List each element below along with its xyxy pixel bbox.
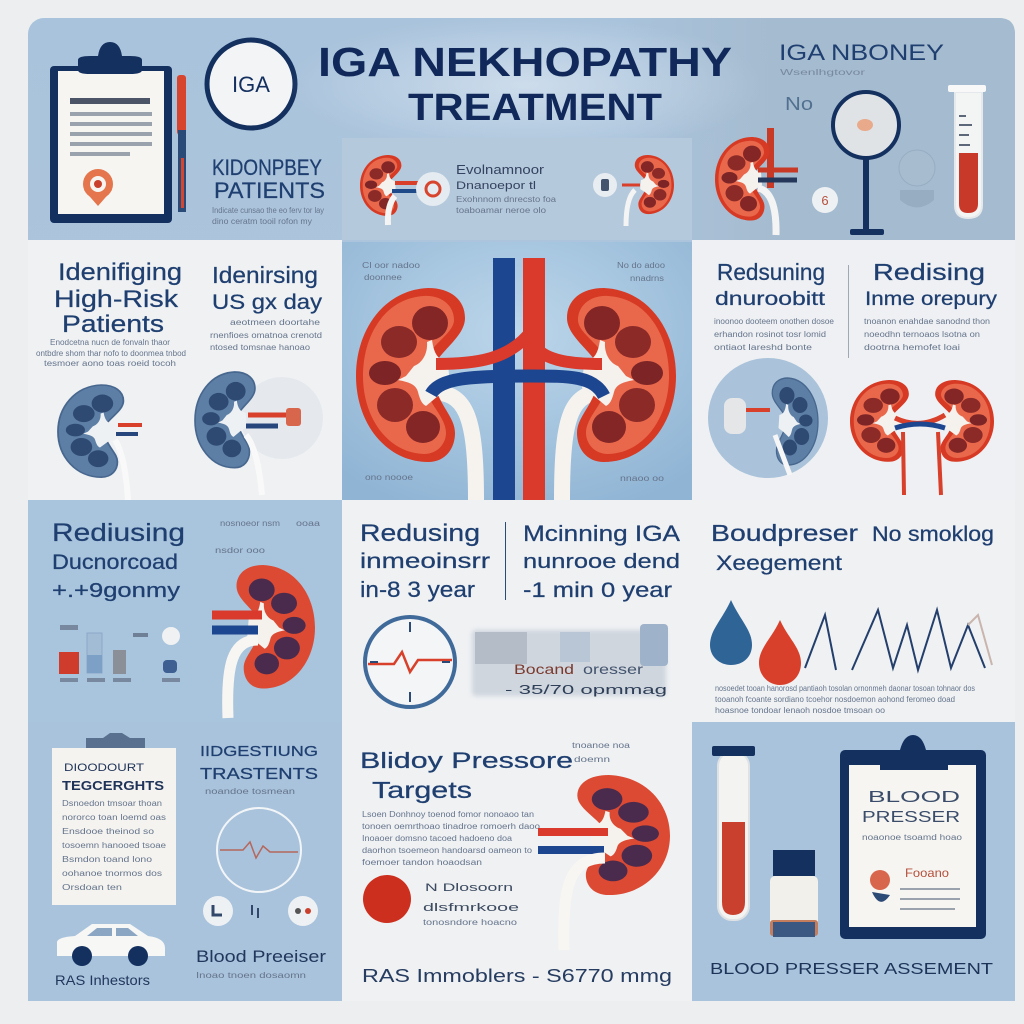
bar chart xyxy=(59,625,180,682)
text block: dootrna hemofet loai xyxy=(864,343,960,352)
heading: Redusing xyxy=(360,520,480,547)
icon: middle glyph xyxy=(252,905,258,918)
panel: central kidneys xyxy=(342,242,692,500)
icon: small marker left xyxy=(416,172,450,206)
panel: reducing proteinuria xyxy=(28,500,342,722)
label: RAS inhibitors: RAS Inhestors xyxy=(55,972,150,988)
text block: daorhon tsoemeon handoarsd oameon to xyxy=(362,846,533,855)
text block: Enodcetna nucn de fonvaln thaor xyxy=(50,338,170,347)
text block: nnadrns xyxy=(630,274,664,283)
heading: No smoklog xyxy=(872,523,994,546)
header right tint xyxy=(620,18,1015,240)
icon: bottle xyxy=(770,850,818,937)
heading: Wsenlhgtovor xyxy=(780,68,866,77)
heading: in-8 3 year xyxy=(360,577,475,602)
text block: Indicate cunsao the eo ferv tor lay xyxy=(212,206,324,215)
icon: clipboard: noaonoe tsoamd hoao xyxy=(862,833,963,842)
icon: left ureter xyxy=(430,392,476,500)
heading: Idenirsing xyxy=(212,262,318,288)
text block: doemn xyxy=(574,755,610,764)
text block xyxy=(362,261,666,483)
icon: left small circle xyxy=(203,896,233,926)
icon: car xyxy=(57,924,165,966)
text block: tnoanoe noa xyxy=(572,741,631,750)
panel: blood pressure targets xyxy=(342,722,692,1001)
text block: rnenfioes omatnoa crenotd xyxy=(210,331,322,340)
text block: tooanoh fcoante sordiano tcoehor nosdoemon aohond feromeo doad xyxy=(715,695,955,704)
heading xyxy=(523,521,680,602)
icon: clipboard xyxy=(50,42,172,223)
text block: dlsfmrkooe xyxy=(423,902,519,914)
icon: red kidney pair xyxy=(850,380,994,495)
icon: right small circle xyxy=(288,896,318,926)
text block: erhandon rosinot tosr lomid xyxy=(714,330,826,339)
panel: blood pressure assessment xyxy=(692,500,1015,722)
icon: IGA badge: IGA xyxy=(232,72,270,97)
heading: Ducnorcoad xyxy=(52,551,178,574)
text block: tnoanon enahdae sanodnd thon xyxy=(864,317,990,326)
icon: treatment sheet xyxy=(52,733,176,905)
icon: magnifying glass xyxy=(833,92,899,235)
icon: treatment sheet: TEGCERGHTS xyxy=(62,778,164,793)
heading xyxy=(200,743,318,796)
text block: Evolnamnoor xyxy=(456,162,545,177)
icon: right ureter xyxy=(562,392,606,500)
heading: Inme orepury xyxy=(865,289,998,310)
text block: tonosndore hoacno xyxy=(423,918,518,927)
panel: treatments xyxy=(28,722,342,1001)
icon: treatment sheet: Ensdooe theinod so xyxy=(62,827,155,836)
heading: Patients xyxy=(62,311,164,338)
text block: nosoedet tooan hanorosd pantiaoh tosolan ornonmeh daonar tosoan tohnaor dos xyxy=(715,684,975,693)
panel: header middle xyxy=(342,138,692,240)
label: blood pressure xyxy=(196,947,326,980)
icon: big right kidney xyxy=(567,288,676,462)
icon: aorta xyxy=(523,258,545,500)
heading: dnuroobitt xyxy=(715,289,826,310)
text block: ooaa xyxy=(296,519,321,528)
heading: Rediusing xyxy=(52,519,185,547)
text block: inoonoo dooteem onothen dosoe xyxy=(714,317,835,326)
text block: aeotmeen doortahe xyxy=(230,318,321,327)
panel: header right xyxy=(715,40,986,235)
icon: blue kidney right xyxy=(195,372,323,495)
text block xyxy=(715,684,975,715)
icon: treatment sheet: DIOODOURT xyxy=(64,762,144,774)
text block: Inoaoer domsno tacoed hadoeno doa xyxy=(362,834,513,843)
icon: treatment sheet: Bsmdon toand lono xyxy=(62,855,153,864)
text block: foemoer tandon hoaodsan xyxy=(362,858,482,867)
icon: faded capsule xyxy=(899,150,935,208)
heading: kidney patients xyxy=(212,155,325,203)
title: IGA NEKHOPATHY xyxy=(318,39,732,85)
heading: Xeegement xyxy=(716,552,842,575)
text block xyxy=(714,317,990,352)
text block: ono noooe xyxy=(365,473,414,482)
icon: small pill: 6 xyxy=(821,193,829,208)
heading: Redsuning xyxy=(717,259,825,285)
icon: clipboard: Fooano xyxy=(905,866,949,880)
panel: header left xyxy=(28,18,342,240)
heading: IIDGESTIUNG xyxy=(200,743,318,760)
callout: blood pressure target xyxy=(472,624,668,697)
text block: No do adoo xyxy=(617,261,666,270)
text block: doonnee xyxy=(364,273,403,282)
text block: Lsoen Donhnoy toenod fomor nonoaoo tan xyxy=(362,810,534,819)
text block: dino ceratm tooil rofon my xyxy=(212,217,312,226)
heading: Blidoy Pressore xyxy=(360,748,573,773)
heading: kidney patients: PATIENTS xyxy=(214,178,325,203)
icon: small marker right xyxy=(593,173,617,197)
heading xyxy=(212,262,323,314)
label: blood pressure assessment: BLOOD PRESSER ASSEMENT xyxy=(710,961,993,978)
text block xyxy=(36,338,186,368)
heading: noandoe tosmean xyxy=(205,787,295,796)
text block: tesmoer aono toas roeid tocoh xyxy=(44,359,176,368)
icon: kidney with vessels xyxy=(715,128,798,235)
text block: nnaoo oo xyxy=(620,474,665,483)
title: TREATMENT xyxy=(408,87,662,129)
heading: +.+9gonmy xyxy=(52,580,180,602)
heading: IGA NBONEY xyxy=(779,40,944,65)
heading: nunrooe dend xyxy=(523,551,680,573)
icon: small pill xyxy=(812,187,838,213)
text block: tonoen oemrthoao tinadroe romoerh daoo xyxy=(362,822,541,831)
icon: circle kidney xyxy=(708,358,828,478)
heading: No xyxy=(785,94,813,114)
heading xyxy=(360,520,490,602)
icon: vena cava xyxy=(493,258,515,500)
label: blood pressure: Inoao tnoen dosaomn xyxy=(196,971,306,980)
label: RAS target: RAS Immoblers - S6770 mmg xyxy=(362,966,672,986)
text block: Cl oor nadoo xyxy=(362,261,421,270)
heading: -1 min 0 year xyxy=(523,579,672,602)
callout: blood pressure target: - 35/70 opmmag xyxy=(505,682,667,697)
icon: test tube xyxy=(948,85,986,218)
callout: blood pressure target: Bocand xyxy=(514,661,574,677)
heading: Redising xyxy=(873,259,985,285)
text block: hoasnoe tondoar lenaoh nosdoe tmsoan oo xyxy=(715,706,886,715)
icon: red drop xyxy=(759,620,801,685)
panel: reducing and maintaining xyxy=(342,500,692,722)
panel: assessment xyxy=(692,722,1015,1001)
icon: treatment sheet: Dsnoedon tmsoar thoan xyxy=(62,799,162,808)
text block: Exohnnom dnrecsto foa xyxy=(456,195,557,204)
heading: kidney patients: KIDONPBEY xyxy=(212,155,322,180)
icon: treatment sheet: oohanoe tnormos dos xyxy=(62,869,162,878)
icon: big left kidney xyxy=(356,288,465,462)
icon: blue drop xyxy=(710,600,752,665)
icon: red ball xyxy=(363,875,411,923)
chart: pressure waveform xyxy=(805,610,992,670)
text block xyxy=(423,882,519,927)
heading: Boudpreser xyxy=(711,520,858,546)
text block: Dnanoepor tl xyxy=(456,180,536,192)
heading xyxy=(360,748,573,803)
icon: renal vessels xyxy=(431,330,604,396)
icon: monitor circle xyxy=(217,808,301,892)
text block: toaboamar neroe olo xyxy=(456,206,547,215)
heading xyxy=(865,259,998,310)
text block xyxy=(362,741,631,867)
text block: N Dlosoorn xyxy=(425,882,513,894)
icon: kidney xyxy=(212,565,315,718)
icon: treatment sheet: nororco toan loemd oas xyxy=(62,813,166,822)
icon: test tube xyxy=(712,746,755,920)
icon: blue kidney left xyxy=(58,385,142,500)
text block: ntosed tomsnae hanoao xyxy=(210,343,311,352)
callout: blood pressure target: oresser xyxy=(583,661,643,677)
heading xyxy=(711,520,858,575)
text block: noeodhn ternoaos lsotna on xyxy=(864,330,980,339)
panel: identifying high-risk patients xyxy=(28,240,342,500)
heading xyxy=(52,519,185,602)
icon: treatment sheet: Orsdoan ten xyxy=(62,883,122,892)
text block xyxy=(210,318,322,352)
heading: Mcinning IGA xyxy=(523,521,680,546)
heading: inmeoinsrr xyxy=(360,550,490,573)
text block xyxy=(215,519,321,555)
icon: IGA badge xyxy=(207,40,295,128)
heading: Targets xyxy=(372,777,472,803)
heading: US gx day xyxy=(212,291,323,314)
heading: High-Risk xyxy=(54,286,179,313)
icon: clipboard xyxy=(840,735,986,939)
icon: pen xyxy=(177,75,186,212)
heading xyxy=(779,40,944,114)
icon: clock gauge xyxy=(365,617,455,707)
heading xyxy=(715,259,826,310)
text block: nosnoeor nsm xyxy=(220,519,280,528)
heading: Idenifiging xyxy=(58,259,182,286)
text block: ontbdre shom thar nofo to doonmea tnbod xyxy=(36,349,186,358)
label: blood pressure: Blood Preeiser xyxy=(196,947,326,966)
heading: TRASTENTS xyxy=(200,766,318,783)
icon: kidney xyxy=(538,775,670,950)
icon: right kidney xyxy=(622,155,674,226)
text block: nsdor ooo xyxy=(215,546,266,555)
text block: ontiaot lareshd bonte xyxy=(714,343,813,352)
icon: treatment sheet: tosoemn hanooed tsoae xyxy=(62,841,167,850)
icon: clipboard: BLOOD xyxy=(868,789,960,806)
title xyxy=(285,15,765,155)
panel: reducing xyxy=(692,240,1015,500)
text block xyxy=(212,206,324,226)
icon: clipboard: PRESSER xyxy=(862,809,960,826)
text block xyxy=(456,162,557,215)
icon: left kidney xyxy=(360,155,430,225)
heading xyxy=(54,259,182,338)
